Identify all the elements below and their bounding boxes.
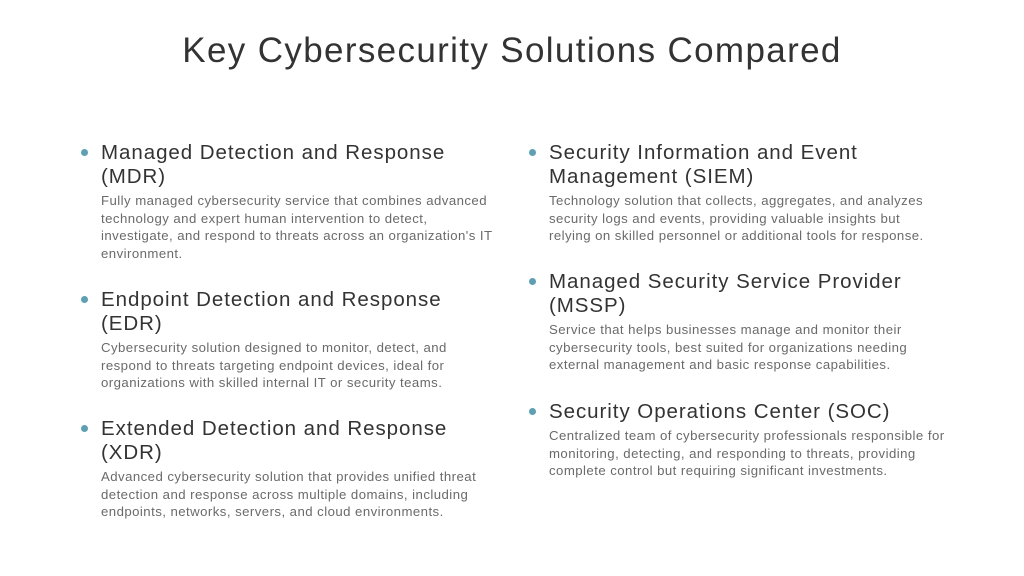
item: SOC: Centralized team of cybersecurity professionals responsible for: [549, 428, 945, 443]
bullet: [529, 149, 536, 156]
item: MSSP: [529, 270, 907, 372]
item: XDR: [81, 417, 476, 519]
item: SIEM: relying on skilled personnel or additional tools for response.: [549, 228, 924, 243]
bullet: [81, 296, 88, 303]
item: MDR: Fully managed cybersecurity service that combines advanced: [101, 193, 487, 208]
item: EDR: organizations with skilled internal IT or security teams.: [101, 375, 442, 390]
bullet: [81, 149, 88, 156]
item: MSSP: cybersecurity tools, best suited for organizations needing: [549, 340, 907, 354]
item: SIEM: security logs and events, providing valuable insights but: [549, 210, 900, 226]
item: XDR: endpoints, networks, servers, and cloud environments.: [101, 504, 444, 519]
bullet: [529, 408, 536, 415]
bullet: [529, 278, 536, 285]
item: MSSP: Service that helps businesses manage and monitor their: [549, 322, 902, 337]
item: SOC: [529, 400, 945, 478]
item: SIEM: Management (SIEM): [549, 165, 754, 188]
item: SIEM: [529, 141, 924, 243]
item: MSSP: Managed Security Service Provider: [549, 270, 902, 293]
item: MDR: [81, 141, 493, 260]
item: MDR: investigate, and respond to threats across an organization's IT: [101, 228, 493, 243]
item: EDR: Endpoint Detection and Response: [101, 288, 442, 311]
item: EDR: [81, 288, 447, 390]
title: Key Cybersecurity Solutions Compared: [182, 31, 842, 70]
item: EDR: Cybersecurity solution designed to monitor, detect, and: [101, 340, 447, 355]
item: EDR: (EDR): [101, 312, 163, 335]
item: SOC: complete control but requiring significant investments.: [549, 463, 887, 478]
bullet: [81, 425, 88, 432]
item: SIEM: Technology solution that collects, aggregates, and analyzes: [549, 193, 923, 208]
item: SOC: Security Operations Center (SOC): [549, 400, 890, 423]
item: MDR: environment.: [101, 246, 183, 260]
item: MDR: Managed Detection and Response: [101, 141, 445, 164]
item: SIEM: Security Information and Event: [549, 141, 858, 164]
item: XDR: detection and response across multiple domains, including: [101, 486, 468, 502]
item: MDR: (MDR): [101, 165, 166, 188]
item: MDR: technology and expert human intervention to detect,: [101, 210, 427, 226]
item: EDR: respond to threats targeting endpoint devices, ideal for: [101, 358, 444, 372]
item: XDR: Advanced cybersecurity solution that provides unified threat: [101, 469, 476, 484]
item: MSSP: external management and basic response capabilities.: [549, 357, 891, 372]
item: XDR: Extended Detection and Response: [101, 417, 447, 440]
item: MSSP: (MSSP): [549, 294, 626, 317]
item: SOC: monitoring, detecting, and responding to threats, providing: [549, 446, 916, 460]
item: XDR: (XDR): [101, 441, 163, 464]
